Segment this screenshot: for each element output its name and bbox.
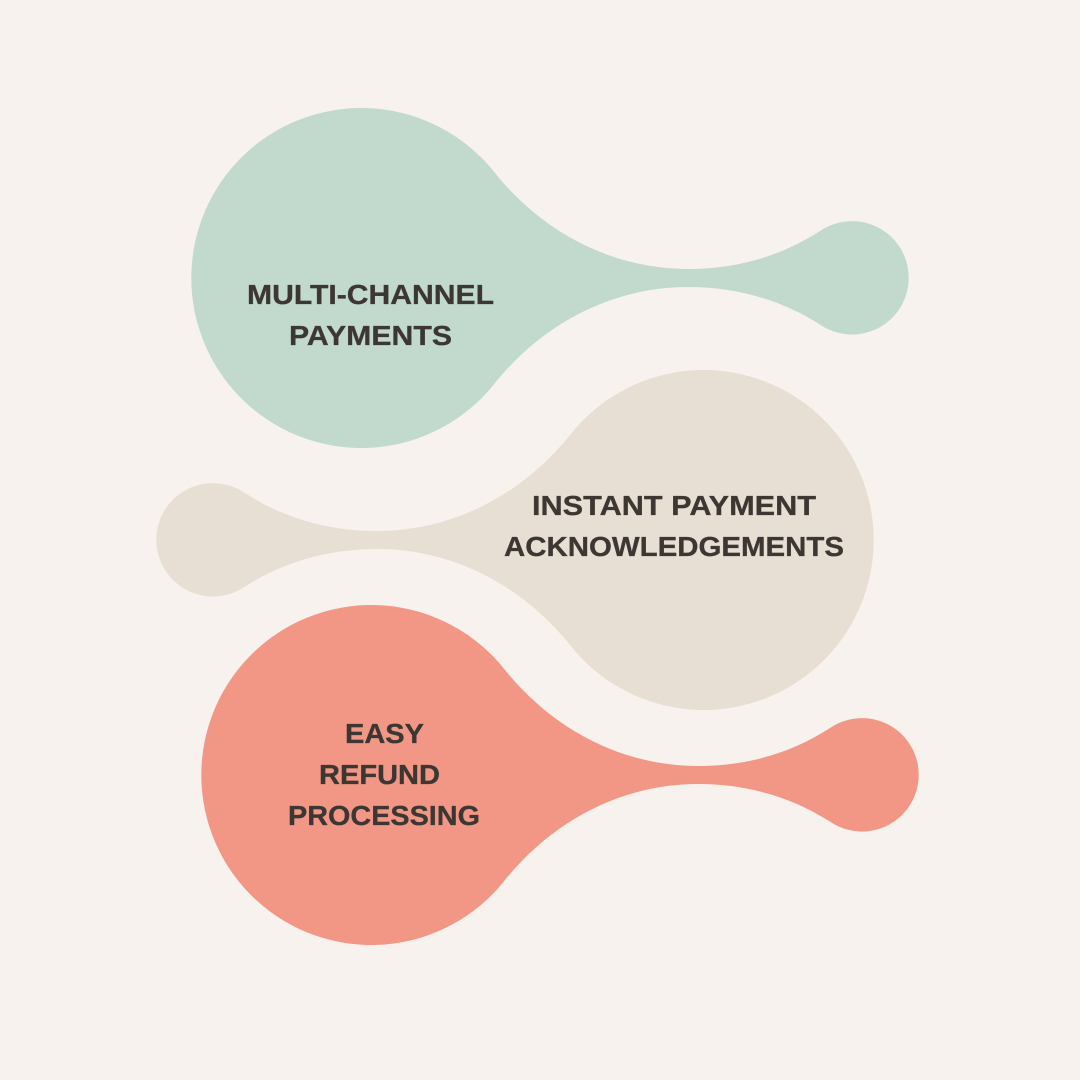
label: easy refund processing: PROCESSING	[288, 800, 480, 831]
label: multi-channel payments: PAYMENTS	[289, 320, 452, 351]
label: easy refund processing: REFUND	[319, 759, 440, 790]
label: multi-channel payments	[247, 279, 494, 351]
label: instant payment acknowledgements	[504, 490, 844, 562]
panel: multi-channel payments	[191, 108, 909, 448]
shape: coral drop	[201, 605, 919, 945]
shape: green drop	[191, 108, 909, 448]
shape: beige drop	[156, 370, 874, 710]
label: instant payment acknowledgements: ACKNOWLEDGEMENTS	[504, 531, 844, 562]
label: multi-channel payments: MULTI-CHANNEL	[247, 279, 494, 310]
panel: easy refund processing	[201, 605, 919, 945]
label: easy refund processing: EASY	[345, 718, 424, 749]
panel: instant payment acknowledgements	[156, 370, 874, 710]
label: instant payment acknowledgements: INSTANT PAYMENT	[532, 490, 816, 521]
label: easy refund processing	[288, 718, 480, 831]
